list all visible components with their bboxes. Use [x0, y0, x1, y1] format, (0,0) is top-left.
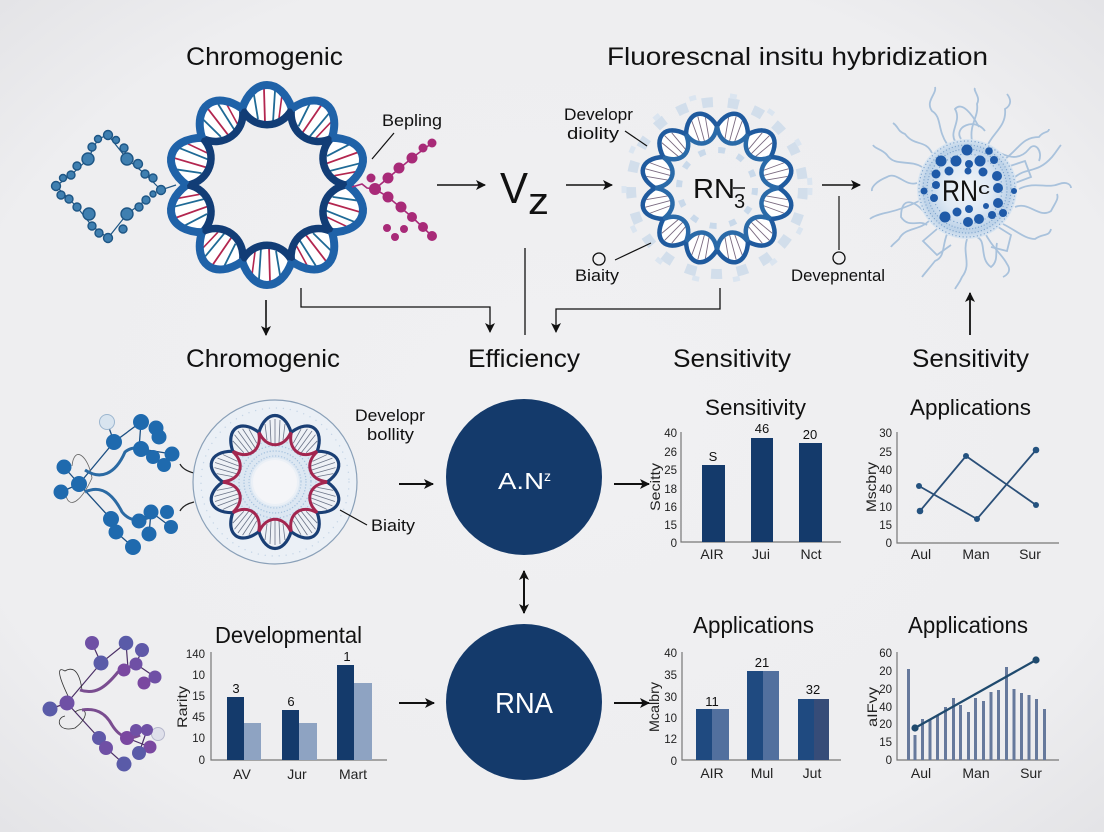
chart: Sensitivity bars: Jui	[752, 546, 770, 562]
node: A.N circle: A.N	[498, 468, 544, 494]
chart: Developmental grouped bars: 0	[199, 755, 205, 767]
chart: Applications line: Aul	[911, 546, 931, 562]
connector: helix to Efficiency	[301, 288, 490, 332]
arrow: helix down to Chromogenic	[265, 300, 267, 335]
label: Bepling	[372, 111, 442, 159]
chart: Applications split bars: Mul	[751, 765, 773, 781]
heading: Sensitivity right: Sensitivity	[912, 345, 1030, 373]
arrow: RNA helix to probe cell	[822, 184, 860, 186]
chart: Sensitivity bars: 46	[755, 421, 769, 436]
arrow: cell to A.N circle	[399, 483, 433, 485]
chart: Applications line: 25	[879, 447, 892, 459]
chart: Sensitivity bars: Nct	[800, 546, 822, 562]
chart: Sensitivity bars: Sensitivity	[705, 395, 806, 420]
chart: Applications bars with trend line: Man	[962, 765, 990, 781]
connector: RNA helix to Efficiency	[556, 288, 720, 332]
arrow: A.N circle to sensitivity chart	[614, 483, 649, 485]
label: Developr diolity	[564, 105, 647, 146]
chart: Developmental grouped bars	[174, 622, 387, 782]
chart: Developmental grouped bars: 45	[192, 712, 205, 724]
chart: Sensitivity bars: Secitty	[647, 463, 663, 511]
heading: Chromogenic: Chromogenic	[186, 345, 340, 373]
label: RNc: RN	[942, 175, 978, 208]
node: RNA circle	[446, 624, 602, 780]
label: Developr bollity: bollity	[367, 425, 415, 444]
icon: blue bead chain	[52, 130, 176, 242]
icon: fluorescent probe cell	[870, 87, 1071, 289]
chart: Applications split bars: 35	[664, 670, 677, 682]
chart: Developmental grouped bars: 140	[186, 649, 205, 661]
chart: Applications bars with trend line: 15	[879, 737, 892, 749]
label: RN3	[693, 173, 745, 213]
chart: Applications split bars: 40	[664, 648, 677, 660]
chart: Applications line: Applications	[910, 395, 1031, 420]
chart: Developmental grouped bars: 3	[232, 681, 240, 696]
icon: helix in circular cell	[193, 400, 357, 564]
chart: Applications line: 30	[879, 428, 892, 440]
heading: Sensitivity: Sensitivity	[673, 345, 792, 373]
chart: Applications split bars: 0	[671, 756, 677, 768]
label: RN3: RN	[693, 173, 735, 204]
chart: Sensitivity bars: 18	[664, 484, 677, 496]
chart: Sensitivity bars	[647, 395, 841, 562]
symbol: Vz: z	[528, 181, 549, 223]
label: Biaity: Biaity	[371, 516, 416, 535]
chart: Applications line: Man	[962, 546, 990, 562]
chart: Sensitivity bars: 15	[664, 520, 677, 532]
arrow: RNA circle to applications chart	[614, 702, 649, 704]
chart: Sensitivity bars: 16	[664, 502, 677, 514]
chart: Applications line: Mscbry	[863, 462, 879, 512]
chart: Applications split bars: 32	[806, 682, 820, 697]
chart: Applications line	[863, 395, 1059, 562]
node: A.N circle: z	[544, 468, 551, 484]
chart: Applications line: 15	[879, 520, 892, 532]
chart: Applications split bars: 10	[664, 713, 677, 725]
label: RN3: 3	[734, 191, 745, 213]
title: Fluorescence in situ hybridization: Fluorescnal insitu hybridization	[607, 43, 988, 71]
icon: blue branched molecule	[54, 414, 194, 555]
chart: Applications bars with trend line: 0	[886, 755, 892, 767]
chart: Applications line: Sur	[1019, 546, 1041, 562]
chart: Developmental grouped bars: 15	[192, 691, 205, 703]
arrow: Vz to RNA helix	[566, 184, 612, 186]
chart: Applications bars with trend line	[864, 612, 1059, 781]
chart: Sensitivity bars: 0	[671, 538, 677, 550]
arrow: Sensitivity up to probe cell	[969, 293, 971, 335]
icon: circular DNA helix	[164, 85, 370, 285]
chart: Applications bars with trend line: 40	[879, 702, 892, 714]
chart: Applications bars with trend line: 20	[879, 666, 892, 678]
node: A.N circle	[446, 399, 602, 555]
label: Developr diolity: Developr	[564, 105, 633, 124]
chart: Applications split bars: 12	[664, 734, 677, 746]
chart: Sensitivity bars: 25	[664, 465, 677, 477]
chart: Sensitivity bars: S	[709, 449, 718, 464]
chart: Applications split bars: 11	[705, 694, 719, 709]
label: Developr diolity: diolity	[567, 124, 620, 143]
chart: Applications line: 0	[886, 538, 892, 550]
chart: Developmental grouped bars: 10	[192, 733, 205, 745]
chart: Developmental grouped bars: Developmental	[215, 622, 362, 648]
arrow: top head of double arrow	[523, 571, 525, 578]
title: Chromogenic: Chromogenic	[186, 43, 343, 71]
symbol: Vz: V	[500, 164, 529, 213]
chart: Applications bars with trend line: 20	[879, 684, 892, 696]
icon: fluorescent RNA helix ring	[623, 94, 811, 282]
chart: Applications line: 40	[879, 484, 892, 496]
chart: Applications split bars: Applications	[693, 612, 814, 638]
chart: Applications bars with trend line: aIFvy	[864, 687, 880, 727]
chart: Applications split bars: AIR	[700, 765, 724, 781]
chart: Applications line: 40	[879, 465, 892, 477]
label: Devepnental	[791, 196, 885, 285]
label: Bepling: Bepling	[382, 111, 442, 130]
label: Developr bollity: Developr	[355, 406, 425, 425]
chart: Developmental grouped bars: 6	[287, 694, 295, 709]
chart: Applications split bars	[646, 612, 841, 781]
chart: Applications split bars: Jut	[803, 765, 821, 781]
chart: Applications bars with trend line: Sur	[1020, 765, 1042, 781]
chart: Sensitivity bars: 26	[664, 447, 677, 459]
chart: Applications split bars: 30	[664, 692, 677, 704]
label: Biaity	[340, 510, 416, 535]
icon: purple branched molecule	[42, 636, 164, 772]
symbol: Vz	[500, 164, 549, 223]
chart: Applications bars with trend line: 20	[879, 719, 892, 731]
arrow: purple molecule chart to RNA circle	[399, 702, 434, 704]
chart: Applications line: 10	[879, 502, 892, 514]
icon: magenta bead chain	[352, 138, 437, 241]
label: Devepnental: Devepnental	[791, 266, 885, 285]
chart: Sensitivity bars: 20	[803, 427, 817, 442]
chart: Applications split bars: 21	[755, 655, 769, 670]
chart: Developmental grouped bars: AV	[233, 766, 251, 782]
chart: Developmental grouped bars: Mart	[339, 766, 367, 782]
chart: Applications bars with trend line: 60	[879, 648, 892, 660]
label: Biaity	[575, 243, 651, 285]
arrow: helix to Vz	[437, 184, 485, 186]
label: RNc: c	[978, 179, 991, 198]
chart: Applications bars with trend line: Applications	[908, 612, 1028, 638]
chart: Developmental grouped bars: 1	[343, 649, 351, 664]
chart: Developmental grouped bars: Rarity	[174, 686, 190, 728]
connector: Vz to Efficiency	[524, 248, 526, 335]
chart: Sensitivity bars: 40	[664, 428, 677, 440]
node: RNA circle: RNA	[495, 688, 554, 720]
heading: Efficiency: Efficiency	[468, 345, 581, 373]
chart: Applications bars with trend line: Aul	[911, 765, 931, 781]
label: Biaity: Biaity	[575, 266, 620, 285]
arrow: double headed between circles	[523, 573, 525, 613]
chart: Developmental grouped bars: 10	[192, 670, 205, 682]
chart: Applications split bars: Mcalbry	[646, 682, 662, 732]
chart: Developmental grouped bars: Jur	[287, 766, 307, 782]
chart: Sensitivity bars: AIR	[700, 546, 724, 562]
label: Developr bollity	[355, 406, 425, 444]
